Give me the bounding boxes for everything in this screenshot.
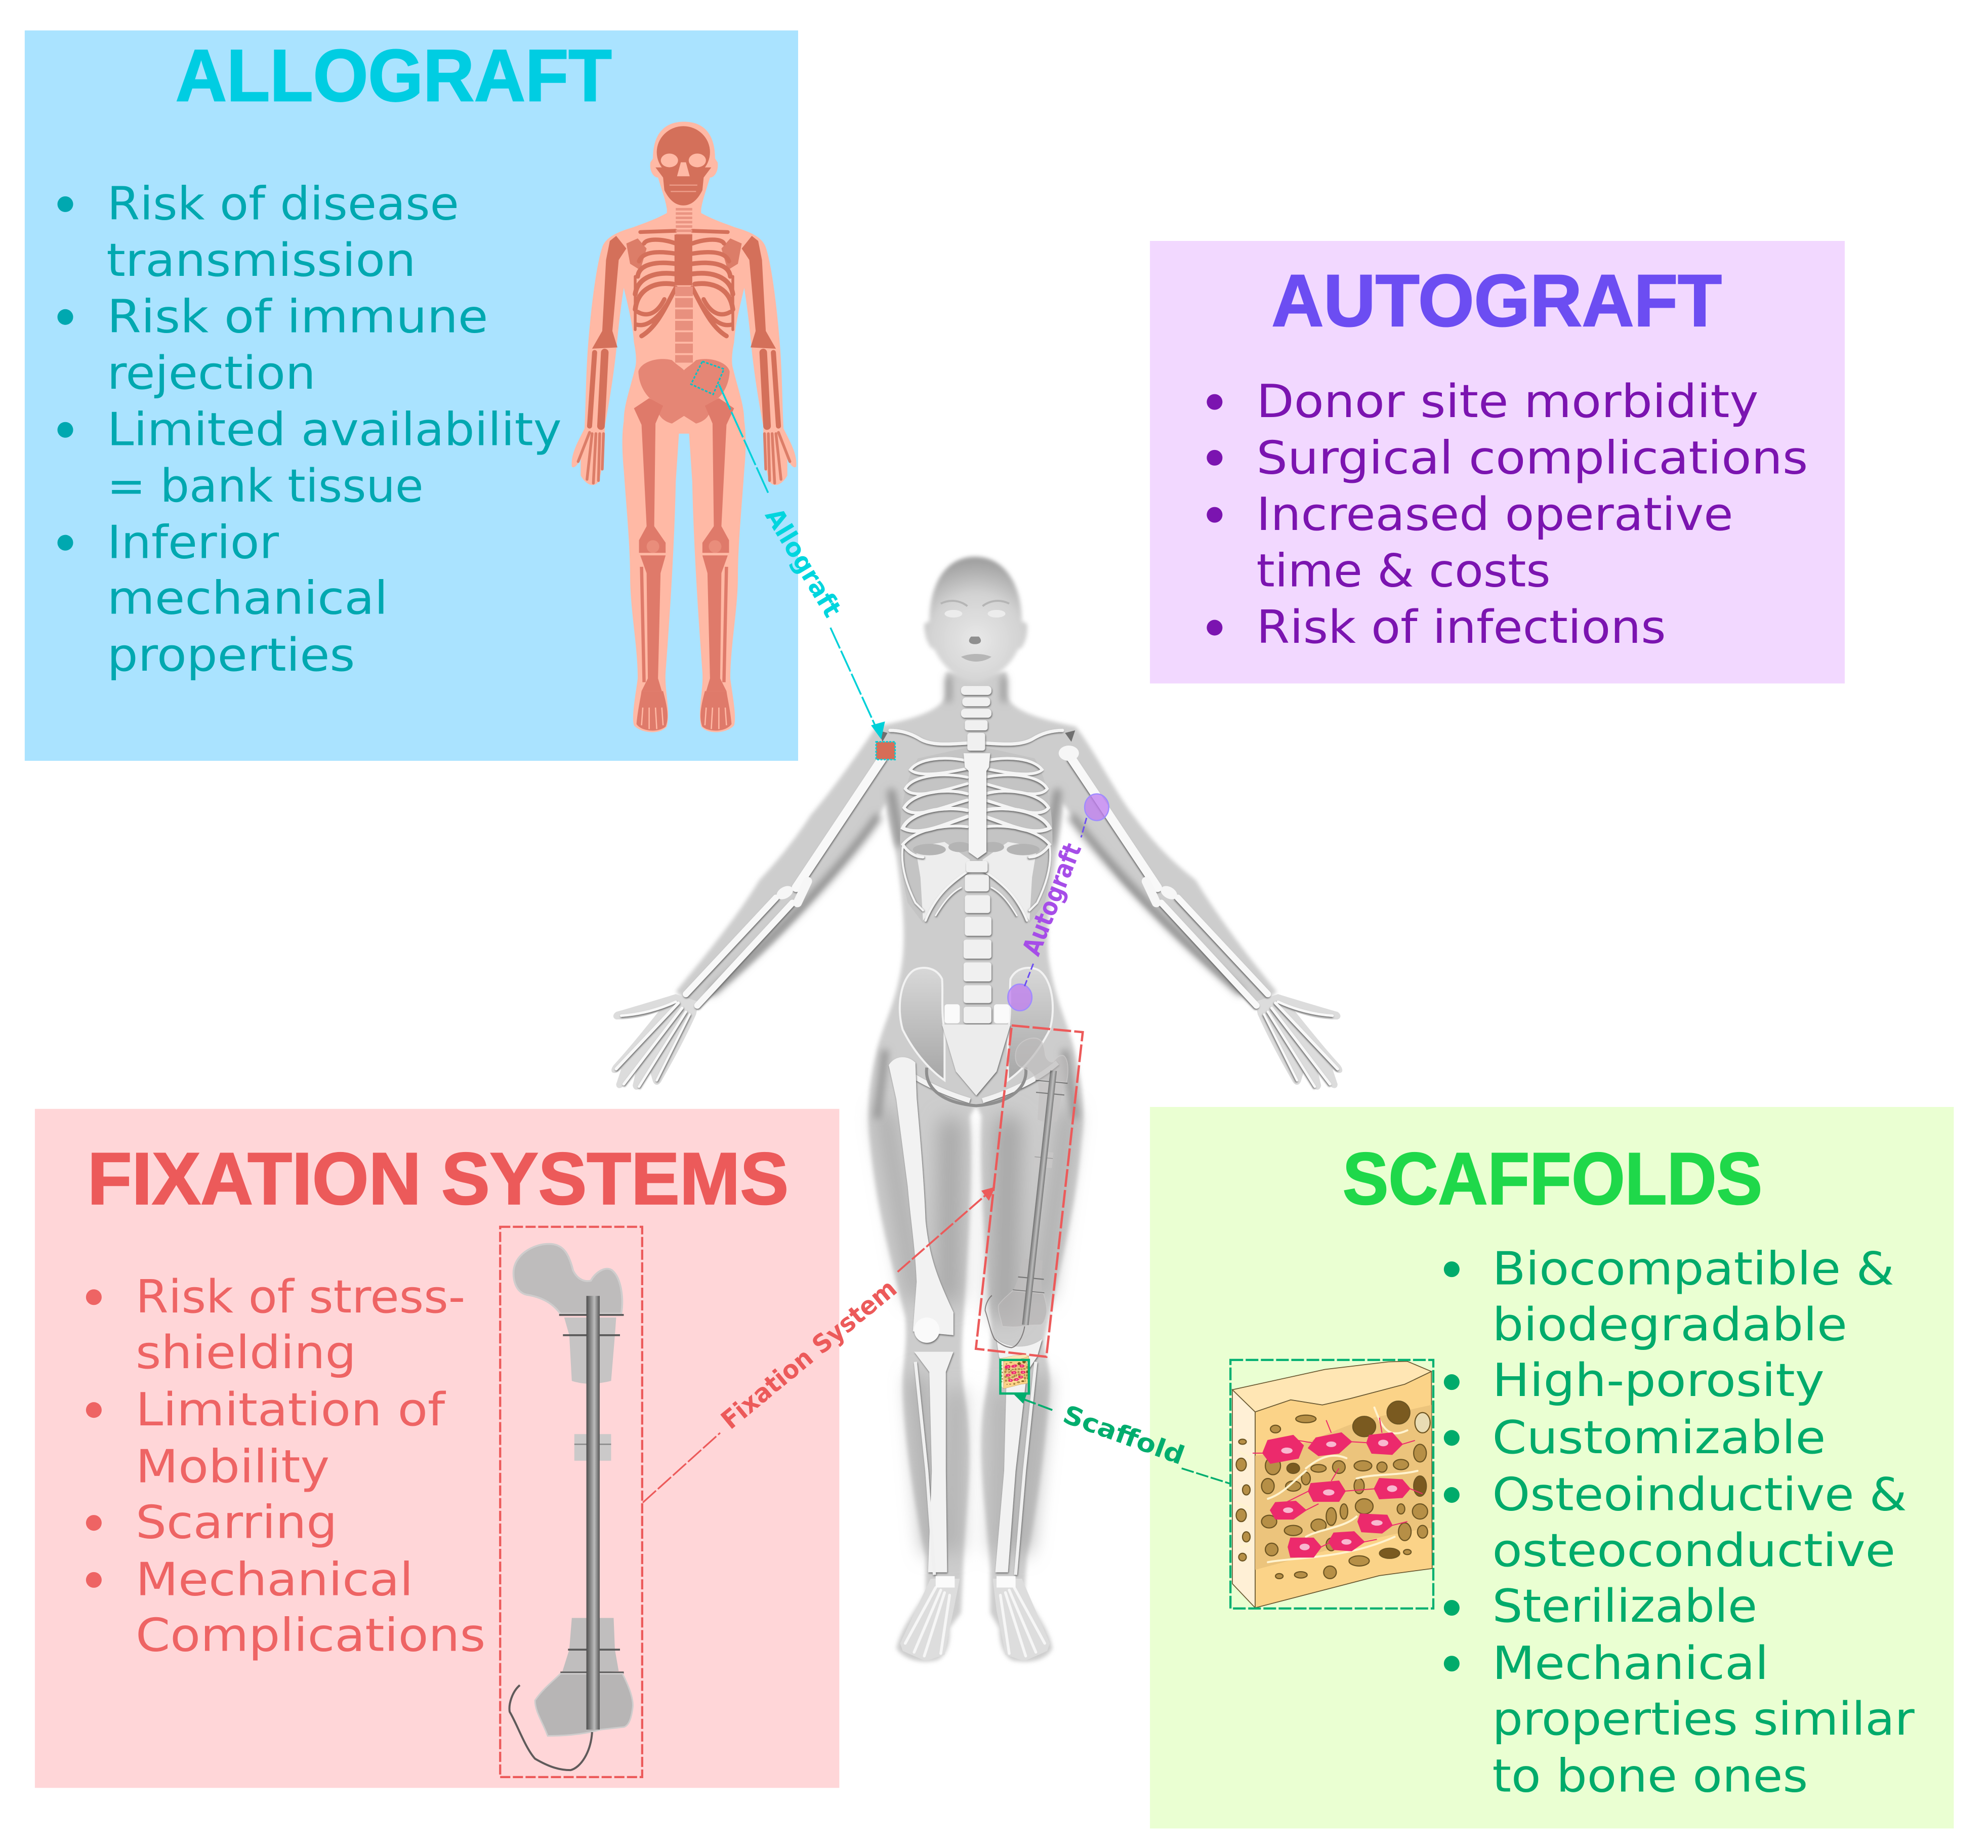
list: scaffold requirements: Biocompatible & [1493,1243,1894,1296]
list: scaffold requirements: biodegradable [1493,1298,1847,1351]
list: scaffold requirements: Osteoinductive & [1493,1468,1907,1522]
list: allograft drawbacks: mechanical [107,572,388,625]
icon: porous scaffold block with cells [1230,1360,1433,1609]
spine [961,686,991,1023]
pelvis [895,968,1057,1105]
list: scaffold requirements [1444,1243,1915,1803]
annotation: autograft connector [1008,794,1109,1011]
figure: central human body with skeleton [611,557,1342,1662]
annotation: scaffold connector [1013,1393,1230,1484]
list: scaffold requirements: Customizable [1493,1411,1826,1464]
list: allograft drawbacks: = bank tissue [107,460,424,513]
label: scaffold: Scaffold [1059,1399,1188,1470]
feet bones [900,1576,1050,1661]
figure: small skeleton body [572,122,796,732]
heading: autograft: AUTOGRAFT [1272,259,1722,342]
face details [941,601,1009,662]
list: autograft drawbacks: Increased operative [1257,488,1733,541]
annotation: thigh implant in red dashed frame [976,1025,1083,1357]
list: fixation drawbacks: Complications [136,1609,485,1662]
label: fixation system: Fixation System [715,1273,902,1435]
list: scaffold requirements: Mechanical [1493,1637,1769,1690]
list: allograft drawbacks [57,177,562,682]
body silhouette [676,672,1277,1662]
list: fixation drawbacks: Mechanical [136,1553,413,1606]
list: autograft drawbacks: Surgical complications [1257,432,1808,485]
list: scaffold requirements: High-porosity [1493,1354,1825,1407]
heading: fixation systems: FIXATION SYSTEMS [88,1137,789,1220]
annotation: small scaffold on shin [1001,1354,1029,1393]
list: allograft drawbacks: Risk of disease [107,177,459,230]
head [924,557,1027,682]
annotation: fixation system connector [643,1187,996,1503]
left arm bones and hand [611,758,883,1090]
list: fixation drawbacks: Limitation of [136,1383,446,1436]
list: fixation drawbacks: Scarring [136,1496,337,1549]
list: allograft drawbacks: Risk of immune [107,290,488,343]
list: autograft drawbacks: time & costs [1257,545,1551,598]
heading: scaffolds: SCAFFOLDS [1343,1137,1762,1220]
list: autograft drawbacks: Risk of infections [1257,601,1666,654]
panel: autograft [1150,241,1845,683]
list: fixation drawbacks [86,1270,485,1662]
panel: fixation systems [35,1109,839,1788]
list: scaffold requirements: Sterilizable [1493,1580,1757,1633]
label: autograft: Autograft [1016,839,1087,960]
limb shading [885,1116,1067,1547]
list: autograft drawbacks [1207,375,1808,654]
list: allograft drawbacks: Limited availability [107,403,562,456]
arm and waist shading [713,678,1240,1116]
list: allograft drawbacks: Inferior [107,516,279,569]
list: scaffold requirements: to bone ones [1493,1750,1808,1803]
list: fixation drawbacks: shielding [136,1326,356,1379]
list: scaffold requirements: osteoconductive [1493,1524,1895,1577]
panel: scaffolds [1150,1107,1954,1828]
right shoulder head [1059,746,1079,761]
label: allograft: Allograft [759,503,848,622]
list: allograft drawbacks: rejection [107,347,316,400]
icon: femoral implant with dashed frame [500,1227,642,1777]
list: fixation drawbacks: Mobility [136,1440,329,1493]
list: autograft drawbacks: Donor site morbidity [1257,375,1759,428]
panel: allograft [25,30,798,761]
list: fixation drawbacks: Risk of stress- [136,1270,465,1324]
leg bones [889,1057,1042,1575]
list: scaffold requirements: properties similar [1493,1693,1915,1746]
list: allograft drawbacks: properties [107,629,355,682]
list: allograft drawbacks: transmission [106,234,416,287]
annotation: allograft connector [691,361,895,760]
heading: allograft: ALLOGRAFT [176,34,612,116]
ribcage [890,730,1062,923]
